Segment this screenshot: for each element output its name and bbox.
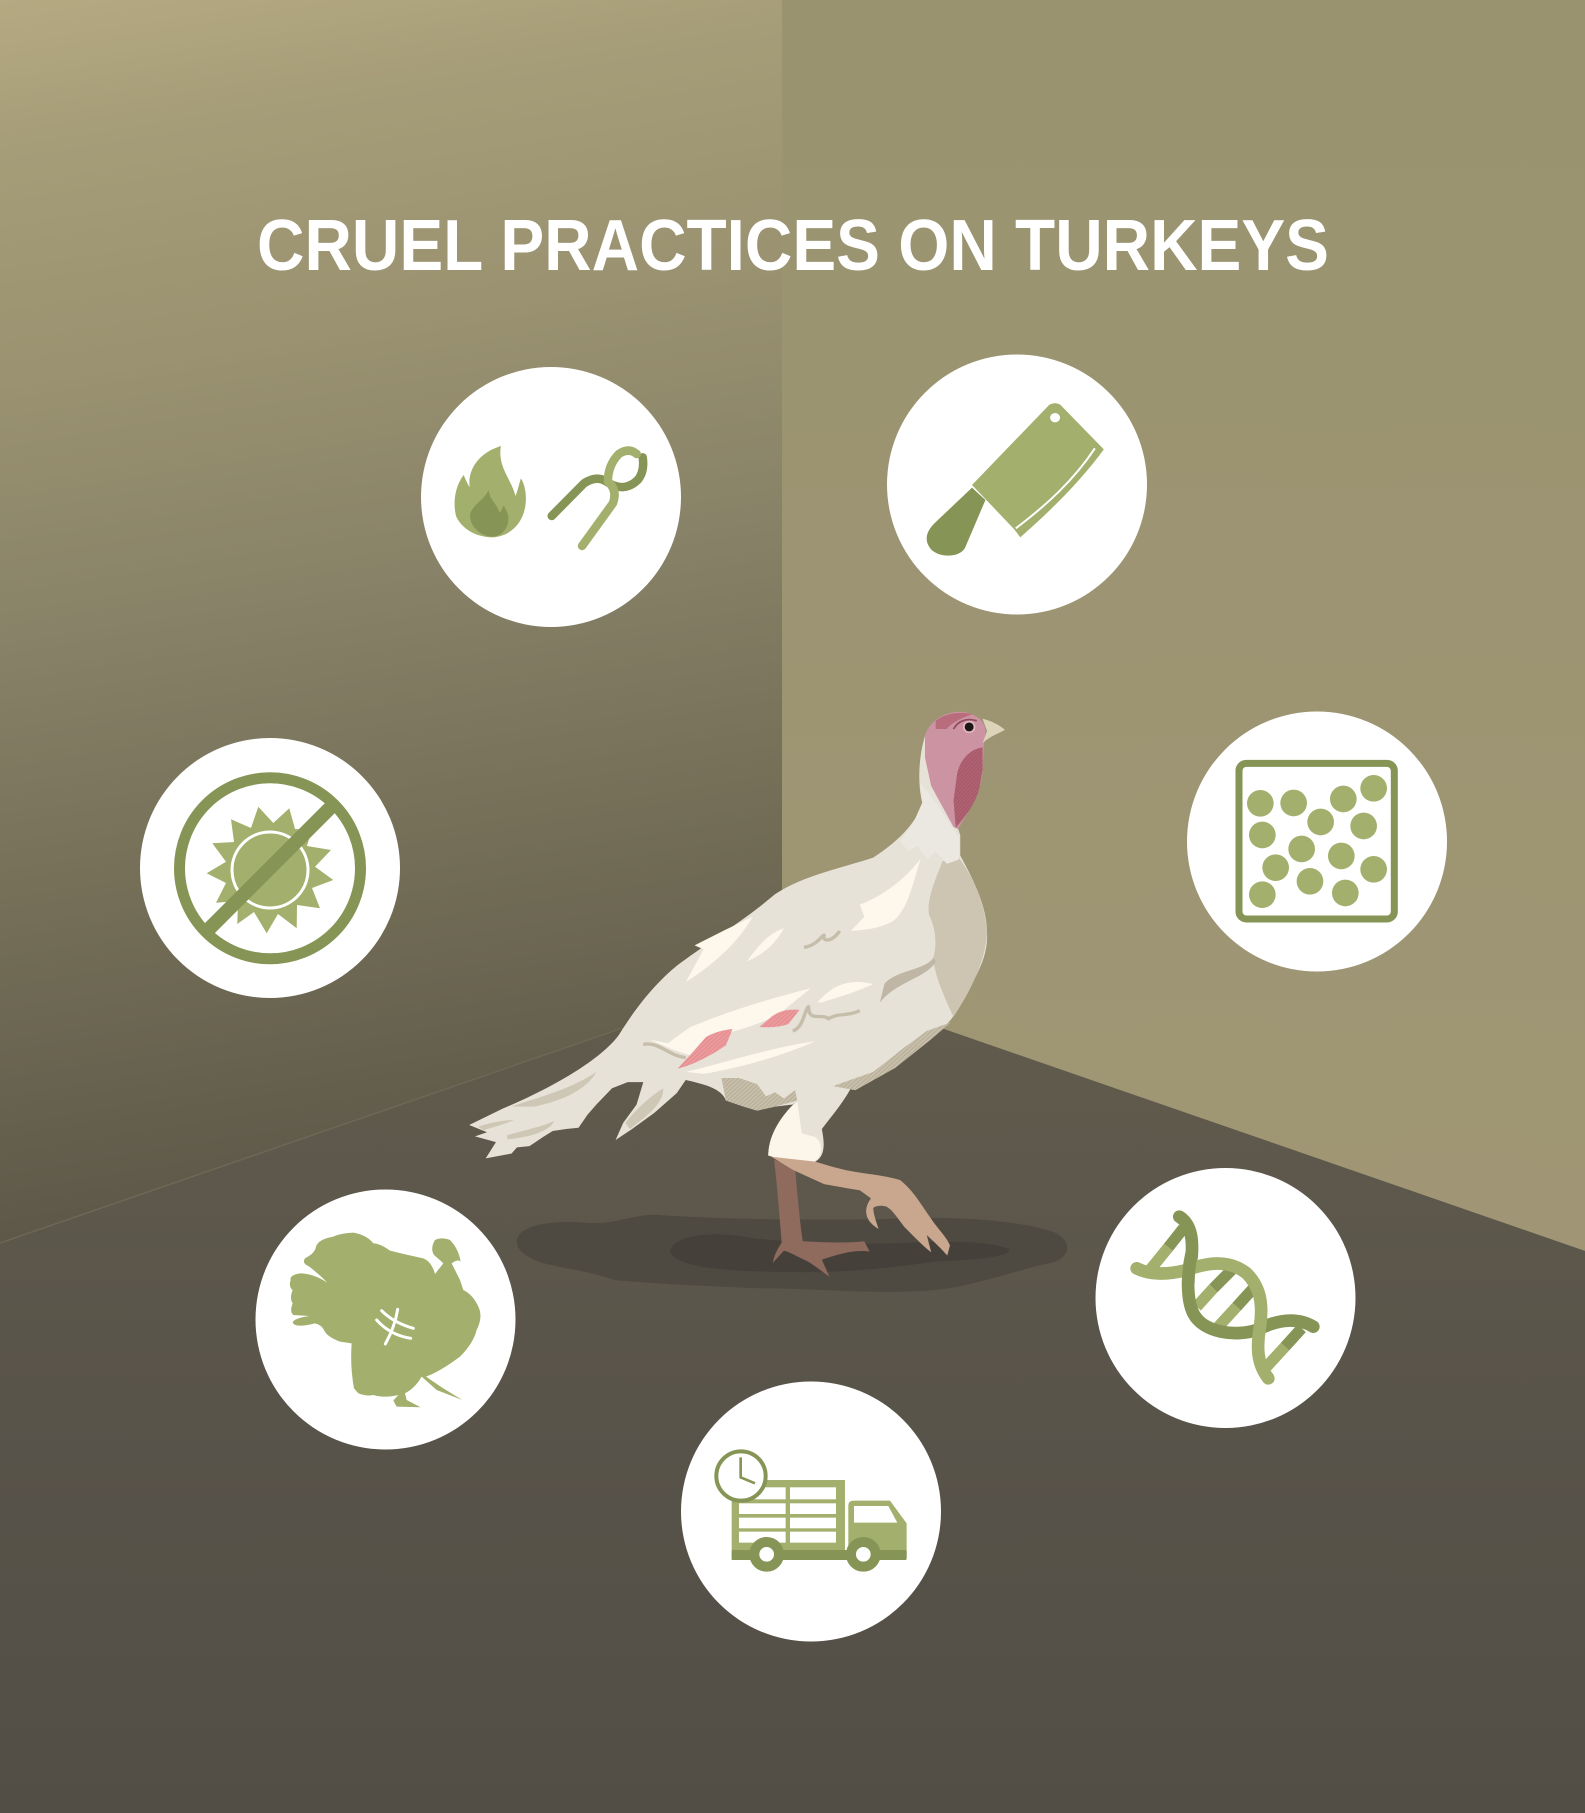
head [925, 712, 1005, 829]
icon: sun [207, 807, 333, 933]
icon circle: branding and debeaking tools [421, 367, 681, 627]
icon circle: injured turkey [256, 1190, 516, 1450]
icon circle: no sunlight [140, 738, 400, 998]
neck and throat feathers [900, 782, 959, 864]
breast [929, 853, 987, 1017]
scratches [377, 1309, 413, 1344]
icon: cleaver handle [927, 488, 985, 556]
icon: truck cargo box [732, 1480, 845, 1560]
wing highlights [649, 858, 921, 1074]
icon: crowded birds [1247, 775, 1387, 908]
icon: clock [716, 1451, 766, 1501]
wounds [678, 1010, 800, 1069]
feather scribbles [643, 931, 860, 1058]
lower feather hatching [721, 1078, 797, 1111]
sun disc [232, 832, 308, 908]
icon: flame [455, 446, 526, 537]
icon: DNA rungs [1150, 1228, 1302, 1367]
icon circle: cleaver [887, 354, 1147, 614]
icon: DNA strands [1137, 1217, 1313, 1378]
icon circle: genetic manipulation [1096, 1168, 1356, 1428]
body [469, 733, 987, 1162]
icon: turkey silhouette [290, 1233, 480, 1407]
icon circle: long transport [681, 1382, 941, 1642]
belly hatching [833, 1022, 951, 1090]
left wall [0, 0, 782, 1243]
floor [0, 973, 1585, 1813]
icon: cleaver blade [972, 403, 1104, 537]
tail feather shading [478, 1072, 663, 1139]
icon: wheels [754, 1542, 876, 1567]
icon: pliers [552, 451, 643, 546]
icon circle: overcrowding [1187, 712, 1447, 972]
right wall [782, 0, 1585, 1251]
icon: pen frame [1239, 763, 1394, 919]
icon: prohibition sign [180, 778, 360, 959]
floor shadow [517, 1215, 1067, 1292]
illustration: white turkey with shadow [469, 712, 1067, 1292]
thigh highlight [768, 1101, 821, 1162]
icon: truck cab [848, 1501, 907, 1557]
wing crease [880, 958, 936, 1002]
blade hole and edge [1050, 413, 1060, 422]
back leg and foot [773, 1160, 870, 1277]
front leg and claw [771, 1157, 950, 1256]
title: CRUEL PRACTICES ON TURKEYS [257, 206, 1329, 286]
truck chassis [732, 1550, 907, 1560]
